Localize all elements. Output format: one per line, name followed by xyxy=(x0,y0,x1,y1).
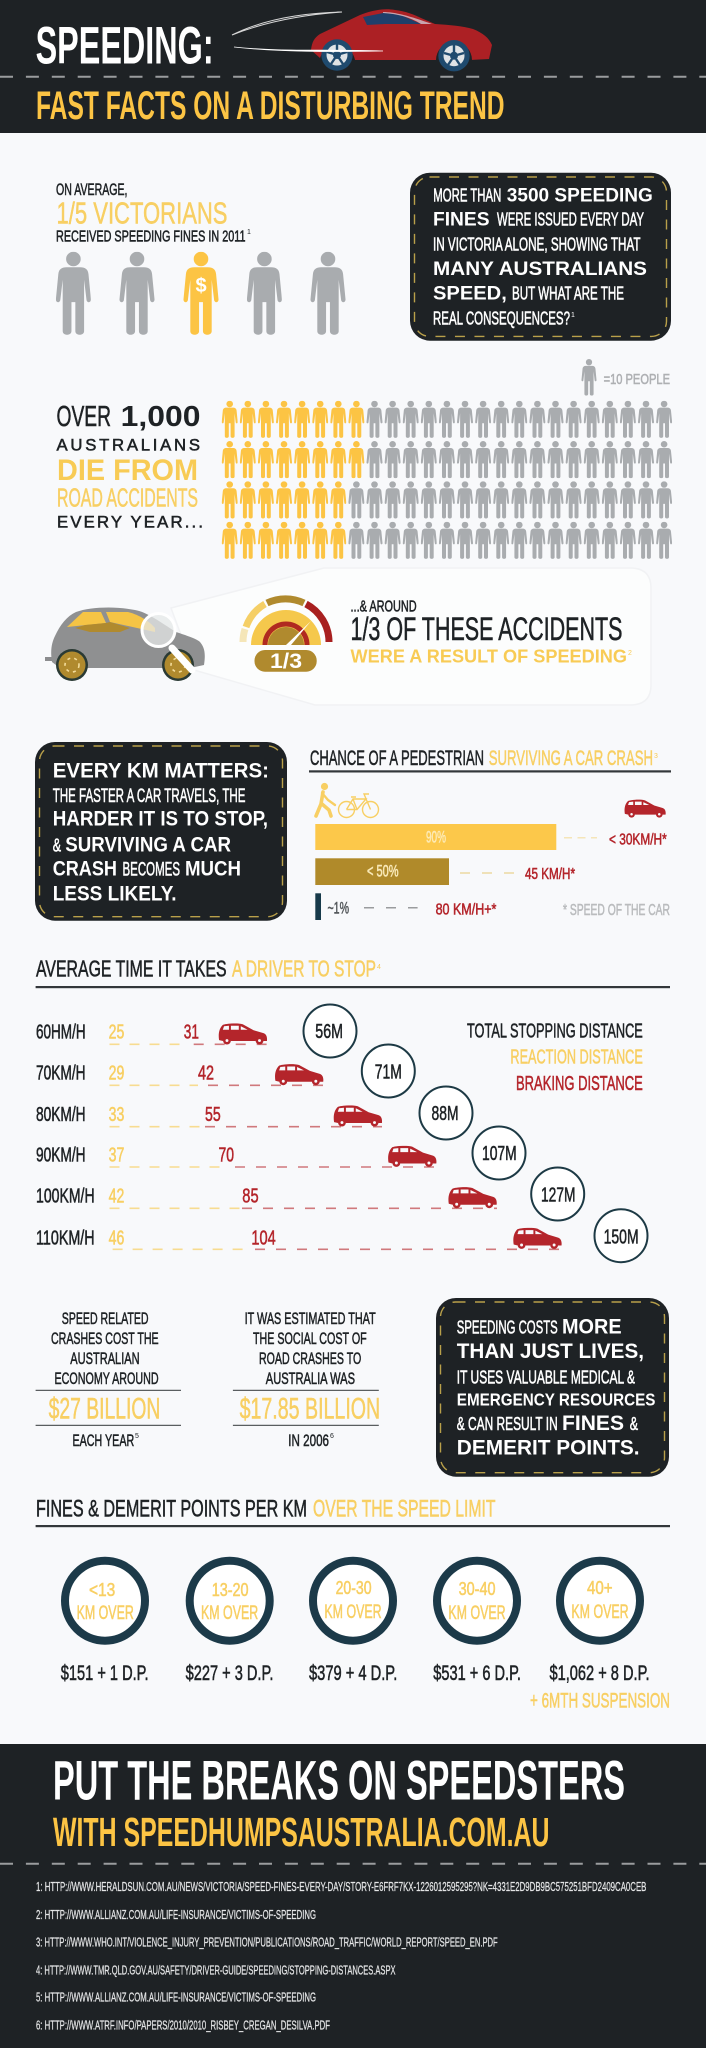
fine tier: 30-40 km over xyxy=(433,1561,521,1685)
row: 110 km/h: 46 xyxy=(109,1227,124,1249)
heading: pedestrian survival: 3 xyxy=(654,753,658,760)
references: 6: HTTP://WWW.ATRF.INFO/PAPERS/2010/2010_RISBEY_CREGAN_DESILVA.PDF xyxy=(36,2018,330,2032)
references: 2: HTTP://WWW.ALLIANZ.COM.AU/LIFE-INSURANCE/VICTIMS-OF-SPEEDING xyxy=(36,1908,316,1922)
text: one third of accidents xyxy=(350,599,632,667)
legend: person equals 10 people: =10 PEOPLE xyxy=(604,371,670,388)
text: one third of accidents: ...& AROUND xyxy=(350,599,417,616)
bar chart: survival by speed: ~1% xyxy=(328,898,349,917)
fine tier: under 13 km over: KM OVER xyxy=(77,1602,134,1624)
stat: 1/5 Victorians: 1 xyxy=(247,229,251,236)
row: 110 km/h: 104 xyxy=(251,1227,276,1249)
stat: $27 billion: ECONOMY AROUND xyxy=(54,1369,159,1388)
icon: bicycle xyxy=(338,794,378,818)
stat: $27 billion: 5 xyxy=(135,1433,139,1440)
panel: every km matters: EVERY KM MATTERS: xyxy=(53,759,269,783)
fine tier: 40+ km over: KM OVER xyxy=(571,1601,629,1623)
stat: over 1,000 Australians: 1,000 xyxy=(121,401,200,433)
row: 90 km/h xyxy=(36,1126,526,1180)
references: 5: HTTP://WWW.ALLIANZ.COM.AU/LIFE-INSURANCE/VICTIMS-OF-SPEEDING xyxy=(36,1991,316,2005)
stat: over 1,000 Australians: EVERY YEAR... xyxy=(57,512,203,531)
stat: $17.85 billion xyxy=(233,1309,380,1450)
row: 60 km/h: 31 xyxy=(184,1021,199,1043)
panel: speeding costs more: FINES xyxy=(562,1411,624,1435)
stat: $27 billion: CRASHES COST THE xyxy=(51,1329,159,1348)
stat: $17.85 billion: THE SOCIAL COST OF xyxy=(253,1329,367,1348)
panel: speeding costs more: THAN JUST LIVES, xyxy=(457,1339,644,1363)
row: 100 km/h: 85 xyxy=(242,1186,259,1208)
panel: 3500 speeding fines: MORE THAN xyxy=(433,185,501,205)
icon row: five people, one fined xyxy=(56,252,346,335)
stat: $17.85 billion: IN 2006 xyxy=(288,1431,329,1450)
row: 80 km/h: 55 xyxy=(205,1104,221,1126)
fine tier: 20-30 km over: KM OVER xyxy=(324,1601,382,1623)
panel: 3500 speeding fines: REAL CONSEQUENCES? xyxy=(433,308,570,328)
panel: every km matters: HARDER IT IS TO STOP, xyxy=(53,806,268,830)
stat: $17.85 billion: $17.85 BILLION xyxy=(240,1392,380,1425)
row: 110 km/h xyxy=(36,1209,648,1262)
row: 60 km/h xyxy=(36,1004,356,1058)
panel: speeding costs more: SPEEDING COSTS xyxy=(457,1316,558,1337)
references xyxy=(36,1880,646,2032)
panel: 3500 speeding fines: 3500 SPEEDING xyxy=(507,185,653,206)
row: 110 km/h: 150M xyxy=(604,1226,639,1248)
fine tier: 13-20 km over: KM OVER xyxy=(201,1602,258,1624)
panel: every km matters: MUCH xyxy=(185,857,241,881)
fine tier: under 13 km over xyxy=(61,1561,149,1685)
icon: grey car with magnifier xyxy=(45,608,205,681)
fine tier: 40+ km over: $1,062 + 8 D.P. xyxy=(550,1662,650,1685)
row: 90 km/h: 90KM/H xyxy=(36,1144,86,1166)
row: 80 km/h: 33 xyxy=(109,1104,124,1126)
panel: every km matters: BECOMES xyxy=(122,860,180,881)
row: 100 km/h: 42 xyxy=(109,1186,124,1208)
icon: speedometer gauge: 1/3 xyxy=(270,650,302,673)
stat: $27 billion xyxy=(36,1309,181,1450)
icon: small red car xyxy=(625,800,666,818)
fine tier: 20-30 km over: $379 + 4 D.P. xyxy=(309,1662,397,1685)
text: one third of accidents: WERE A RESULT OF SPEEDING xyxy=(350,646,627,667)
footer band xyxy=(0,1744,706,2048)
panel: 3500 speeding fines: MANY AUSTRALIANS xyxy=(433,258,647,280)
fine tier: 13-20 km over: 13-20 xyxy=(212,1579,249,1600)
fine tier: under 13 km over: $151 + 1 D.P. xyxy=(61,1662,149,1685)
panel: every km matters xyxy=(35,742,287,921)
legend: distances xyxy=(467,1020,643,1095)
panel: speeding costs more: MORE xyxy=(562,1314,622,1338)
row: 60 km/h: 56M xyxy=(315,1021,343,1043)
stat: $17.85 billion: IT WAS ESTIMATED THAT xyxy=(245,1309,376,1328)
fine tier: 13-20 km over xyxy=(186,1561,273,1685)
fine tier: 30-40 km over: $531 + 6 D.P. xyxy=(433,1662,521,1685)
stat: over 1,000 Australians: ROAD ACCIDENTS xyxy=(57,485,198,513)
heading: stopping distance: A DRIVER TO STOP xyxy=(232,956,376,982)
row: 90 km/h: 37 xyxy=(109,1144,124,1166)
row: 80 km/h xyxy=(36,1086,472,1140)
fine tier: under 13 km over: <13 xyxy=(89,1579,115,1600)
panel: speeding costs more: DEMERIT POINTS. xyxy=(457,1435,640,1459)
icon: speedometer gauge xyxy=(243,599,329,673)
stat: 1/5 Victorians xyxy=(56,181,251,245)
pictogram: people grid xyxy=(222,401,672,559)
bar chart: survival by speed: 45 KM/H* xyxy=(525,866,575,883)
panel: every km matters: & xyxy=(53,835,61,855)
panel: 3500 speeding fines: SPEED, xyxy=(433,282,507,304)
row: 70 km/h: 42 xyxy=(198,1062,214,1084)
stat: over 1,000 Australians: AUSTRALIANS xyxy=(56,435,200,454)
fine tier: 40+ km over xyxy=(530,1561,670,1712)
stat: 1/5 Victorians: RECEIVED SPEEDING FINES IN 2011 xyxy=(56,228,246,245)
panel: every km matters: THE FASTER A CAR TRAVELS, THE xyxy=(53,786,246,807)
fine tier: 30-40 km over: KM OVER xyxy=(448,1602,506,1624)
panel: 3500 speeding fines: 1 xyxy=(571,312,575,319)
row: 70 km/h xyxy=(36,1044,415,1098)
bar chart: survival by speed: < 30KM/H* xyxy=(609,831,667,848)
icon: red sports car xyxy=(232,9,492,71)
fine tier: 20-30 km over xyxy=(309,1561,397,1685)
stat: over 1,000 Australians: OVER xyxy=(56,401,111,433)
chart: stopping distances xyxy=(36,1004,648,1262)
row: 80 km/h: 80KM/H xyxy=(36,1104,86,1126)
icon row: five people, one fined: $ xyxy=(195,275,207,297)
stat: $17.85 billion: 6 xyxy=(330,1433,334,1440)
panel: speeding costs more: & xyxy=(630,1414,638,1434)
legend: person equals 10 people xyxy=(581,359,670,396)
bar chart: survival by speed: < 50% xyxy=(367,862,399,881)
panel: every km matters: LESS LIKELY. xyxy=(53,881,177,905)
panel: speeding costs more xyxy=(436,1298,669,1477)
bar chart: survival by speed: 90% xyxy=(426,828,446,847)
panel: 3500 speeding fines: BUT WHAT ARE THE xyxy=(512,283,624,303)
stat: $17.85 billion: ROAD CRASHES TO xyxy=(259,1349,361,1368)
bar chart: survival by speed xyxy=(315,824,667,920)
row: 60 km/h: 25 xyxy=(109,1021,124,1043)
row: 90 km/h: 107M xyxy=(482,1143,517,1165)
stat: 1/5 Victorians: ON AVERAGE, xyxy=(56,181,128,199)
stat: over 1,000 Australians xyxy=(56,401,203,531)
panel: every km matters: CRASH xyxy=(53,857,117,881)
fine tier: 40+ km over: 40+ xyxy=(587,1577,613,1598)
heading: stopping distance: 4 xyxy=(377,964,381,971)
stat: over 1,000 Australians: DIE FROM xyxy=(57,454,198,487)
legend: distances: BRAKING DISTANCE xyxy=(516,1073,643,1095)
heading: fines and demerit points: OVER THE SPEED LIMIT xyxy=(313,1496,496,1523)
fine tier: 20-30 km over: 20-30 xyxy=(336,1577,372,1598)
heading: pedestrian survival: CHANCE OF A PEDESTRIAN xyxy=(310,747,484,770)
panel: 3500 speeding fines: FINES xyxy=(433,209,490,231)
stat: $27 billion: $27 BILLION xyxy=(49,1392,160,1425)
panel: speeding costs more: & CAN RESULT IN xyxy=(457,1413,558,1434)
row: 70 km/h: 29 xyxy=(109,1062,124,1084)
heading: stopping distance: AVERAGE TIME IT TAKES xyxy=(36,956,227,982)
row: 80 km/h: 88M xyxy=(432,1103,458,1125)
panel: 3500 speeding fines xyxy=(410,173,671,341)
row: 100 km/h: 127M xyxy=(541,1184,576,1206)
stat: $27 billion: SPEED RELATED xyxy=(62,1309,149,1328)
heading: fines and demerit points: FINES & DEMERIT POINTS PER KM xyxy=(36,1496,307,1523)
panel: speeding costs more: EMERGENCY RESOURCES xyxy=(457,1390,655,1410)
row: 100 km/h xyxy=(36,1168,584,1220)
bar chart: survival by speed: 80 KM/H+* xyxy=(436,901,496,918)
references: 4: HTTP://WWW.TMR.QLD.GOV.AU/SAFETY/DRIVER-GUIDE/SPEEDING/STOPPING-DISTANCES.ASPX xyxy=(36,1963,396,1977)
stat: $27 billion: AUSTRALIAN xyxy=(70,1349,140,1368)
stat: 1/5 Victorians: 1/5 VICTORIANS xyxy=(56,195,228,230)
fine tier: 13-20 km over: $227 + 3 D.P. xyxy=(186,1662,273,1685)
stat: $27 billion: EACH YEAR xyxy=(72,1431,134,1450)
row: 100 km/h: 100KM/H xyxy=(36,1186,95,1208)
row: 70 km/h: 71M xyxy=(375,1061,402,1083)
icon: pedestrian xyxy=(316,783,335,816)
callout: magnified speedometer bubble xyxy=(171,568,651,705)
fine tier: 30-40 km over: 30-40 xyxy=(459,1578,496,1599)
row: 70 km/h: 70KM/H xyxy=(36,1062,86,1084)
row: 110 km/h: 110KM/H xyxy=(36,1227,95,1249)
header band xyxy=(0,0,706,133)
panel: every km matters: SURVIVING A CAR xyxy=(65,832,231,856)
text: one third of accidents: 2 xyxy=(628,650,632,657)
title: SPEEDING: xyxy=(36,16,214,75)
row: 60 km/h: 60HM/H xyxy=(36,1021,86,1043)
heading: fines and demerit points xyxy=(36,1496,670,1527)
heading: stopping distance xyxy=(36,956,670,988)
row: 90 km/h: 70 xyxy=(218,1144,234,1166)
stat: $17.85 billion: AUSTRALIA WAS xyxy=(266,1369,355,1388)
